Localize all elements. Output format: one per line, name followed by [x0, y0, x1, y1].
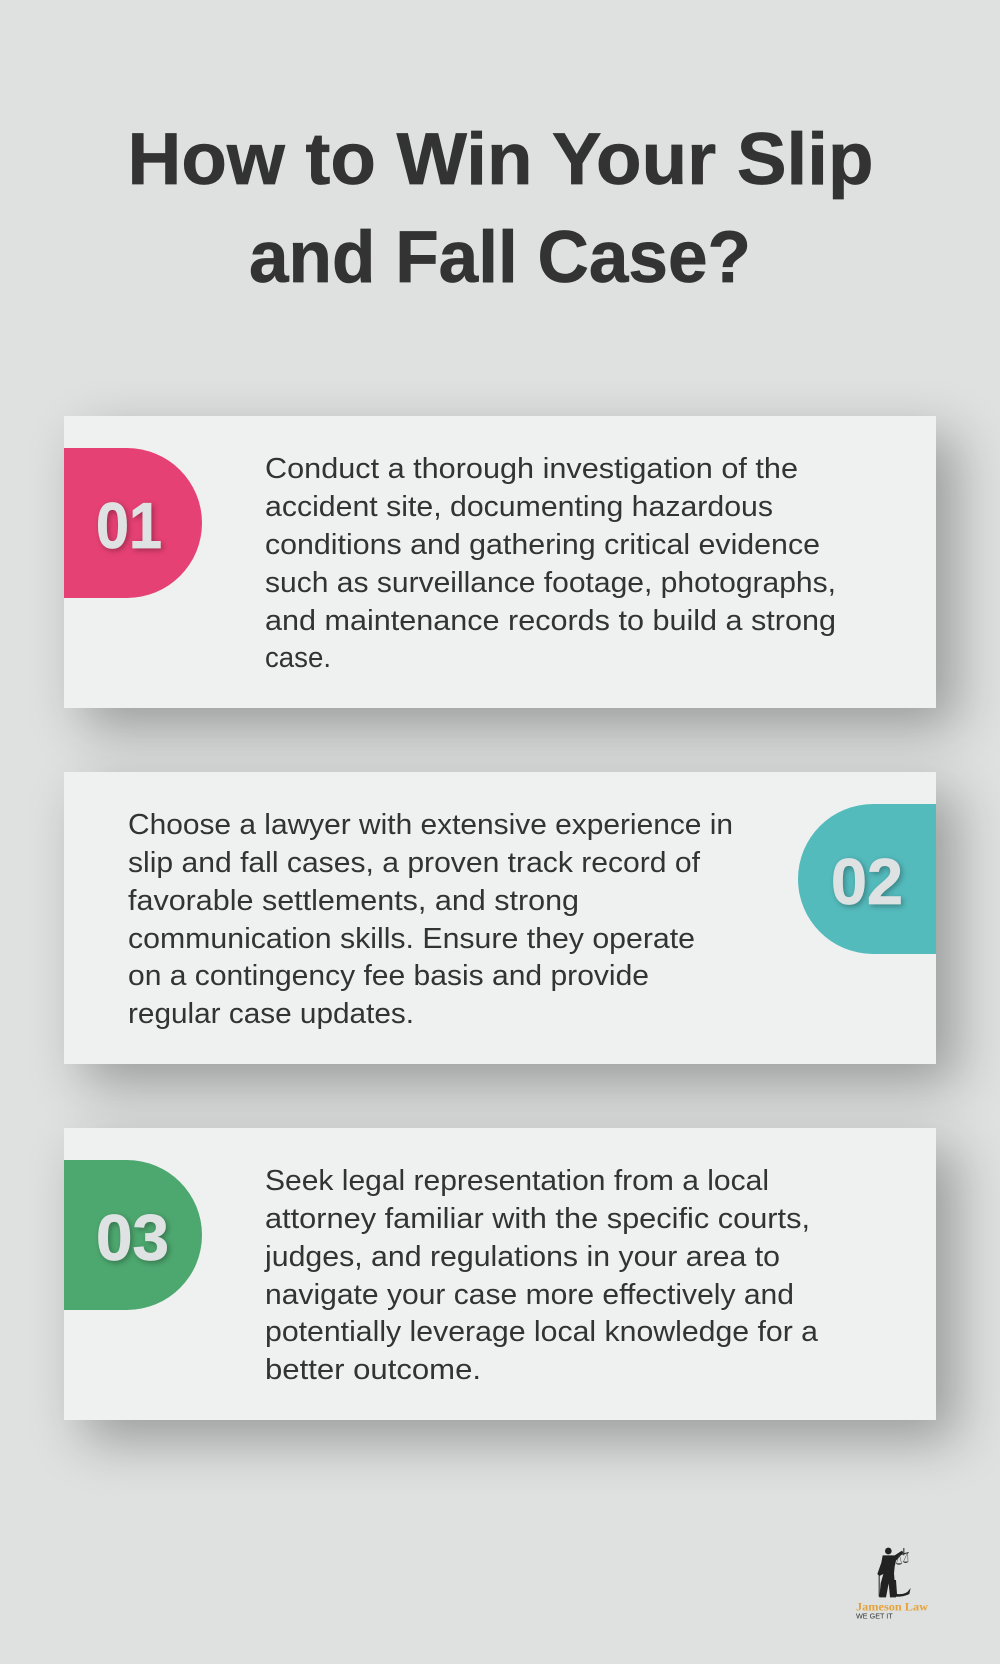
- text block: step 01 description: [265, 453, 836, 674]
- text block: step 03 description: attorney familiar with the specific courts,: [265, 1203, 810, 1235]
- text block: step 01 description: Conduct a thorough investigation of the: [265, 453, 798, 485]
- icon: lady justice with scales: [877, 1548, 911, 1597]
- panel: step 03: [64, 1128, 936, 1420]
- title: and Fall Case?: [249, 217, 751, 298]
- logo name: Jameson Law: [856, 1601, 929, 1613]
- text block: step 03 description: navigate your case more effectively and: [265, 1279, 794, 1311]
- text block: step 01 description: such as surveillance footage, photographs,: [265, 567, 836, 599]
- badge: 03: 03: [96, 1201, 169, 1274]
- text block: step 03 description: better outcome.: [265, 1354, 481, 1386]
- text block: step 02 description: favorable settlements, and strong: [128, 885, 579, 917]
- badge: 01: 01: [96, 489, 162, 562]
- text block: step 03 description: judges, and regulations in your area to: [264, 1241, 780, 1273]
- text block: step 02 description: [128, 809, 733, 1030]
- text block: step 02 description: communication skills. Ensure they operate: [128, 923, 695, 955]
- text block: step 01 description: and maintenance records to build a strong: [265, 605, 836, 637]
- panel: step 02: [64, 772, 936, 1064]
- text block: step 02 description: Choose a lawyer with extensive experience in: [128, 809, 733, 841]
- badge: 02: 02: [831, 845, 903, 918]
- text block: step 03 description: potentially leverage local knowledge for a: [265, 1316, 818, 1348]
- panel: step 01: [64, 416, 936, 708]
- text block: step 02 description: on a contingency fee basis and provide: [128, 960, 649, 992]
- text block: step 01 description: conditions and gathering critical evidence: [265, 529, 820, 561]
- text block: step 03 description: [264, 1165, 818, 1386]
- text block: step 01 description: case.: [265, 642, 331, 674]
- badge: 02: [798, 804, 936, 954]
- badge: 03: [64, 1160, 202, 1310]
- text block: step 02 description: slip and fall cases, a proven track record of: [128, 847, 700, 879]
- title: [128, 119, 873, 298]
- text block: step 01 description: accident site, documenting hazardous: [265, 491, 773, 523]
- logo tagline: WE GET IT: [856, 1613, 893, 1620]
- title: How to Win Your Slip: [128, 119, 873, 200]
- badge: 01: [64, 448, 202, 598]
- text block: step 03 description: Seek legal representation from a local: [265, 1165, 769, 1197]
- logo: Jameson Law: [856, 1548, 929, 1620]
- text block: step 02 description: regular case updates.: [128, 998, 414, 1030]
